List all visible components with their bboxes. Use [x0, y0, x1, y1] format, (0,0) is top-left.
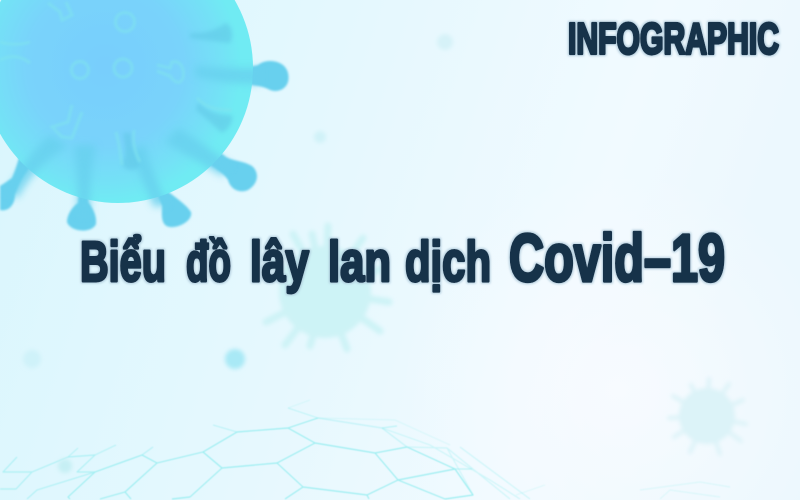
title: lây — [250, 230, 309, 294]
particle — [23, 350, 41, 368]
icon: faded center virus — [266, 226, 389, 349]
receptor rings — [28, 4, 184, 162]
soft spike stalks on body — [6, 66, 260, 215]
icon: faded right virus — [669, 379, 746, 454]
title: dịch — [405, 230, 491, 294]
icon: large virus — [0, 0, 289, 231]
spike heads on body — [122, 23, 232, 170]
soft light glow — [380, 170, 800, 500]
hexagon mesh globe — [0, 400, 730, 499]
particle — [437, 34, 453, 50]
particle — [225, 349, 245, 369]
title — [80, 221, 725, 296]
title: Biểu — [80, 230, 166, 294]
title: lan — [328, 230, 391, 294]
particle — [58, 459, 72, 473]
title: đồ — [186, 230, 231, 294]
title: Covid–19 — [509, 221, 725, 296]
virus body — [0, 0, 253, 203]
outer spikes — [0, 61, 289, 231]
particle — [314, 131, 326, 143]
small blurred particles — [23, 34, 453, 473]
